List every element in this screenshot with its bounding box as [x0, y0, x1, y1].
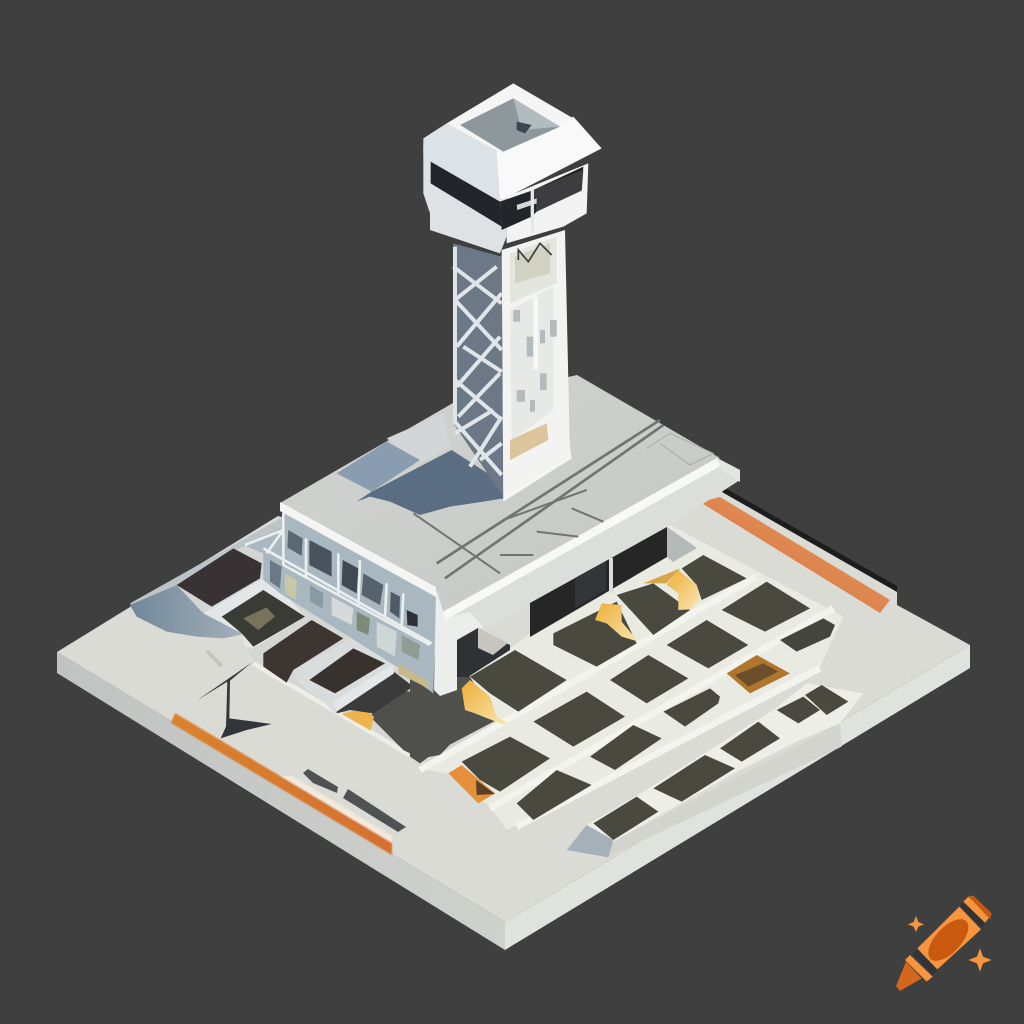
asphalt forecourt	[410, 640, 497, 763]
building shadow	[130, 585, 247, 638]
vane shadow	[197, 663, 272, 738]
left courtyard	[130, 517, 470, 763]
entry door	[457, 628, 510, 677]
facade frames	[245, 513, 432, 645]
cab windows	[431, 162, 502, 227]
pale frame	[420, 525, 843, 830]
orange strip: back right	[700, 497, 890, 613]
apron edge highlight	[253, 663, 410, 755]
lower terminal strip	[607, 723, 842, 857]
back rim	[130, 517, 283, 610]
roof streaks	[413, 420, 713, 578]
asphalt	[370, 690, 470, 758]
tower plinth	[503, 447, 572, 502]
sparkle	[908, 916, 924, 932]
tower shaft left face	[453, 243, 503, 497]
orange strip: front left	[171, 713, 392, 855]
crayon tip	[896, 962, 922, 991]
lattice	[453, 247, 502, 475]
control tower	[423, 83, 602, 502]
yellow light	[342, 708, 374, 731]
windows	[287, 530, 303, 556]
roof shadow	[337, 413, 713, 578]
roof	[280, 375, 740, 620]
wall	[445, 458, 740, 637]
parking slots: front pair	[303, 769, 406, 832]
tower shaft right face	[502, 230, 570, 497]
glazing	[530, 527, 667, 637]
roof lantern	[460, 98, 560, 152]
right eave	[443, 458, 724, 620]
parking grid	[410, 525, 863, 857]
brown bay	[727, 655, 790, 693]
orange corner	[448, 765, 495, 803]
cab roof	[423, 123, 502, 198]
dark bays	[177, 548, 262, 607]
terminal right wall and entrance	[434, 458, 740, 696]
road bars	[420, 577, 833, 827]
white pillar	[434, 590, 483, 696]
base platform	[57, 488, 970, 950]
crayon logo	[896, 896, 992, 991]
crayon collar	[905, 955, 933, 982]
crayon body	[917, 907, 981, 969]
building left facade	[243, 510, 437, 693]
yellow lights	[462, 680, 508, 724]
left eave	[280, 502, 436, 597]
dark bays	[682, 555, 747, 600]
cab lower skirt	[423, 145, 507, 253]
edge marking	[205, 650, 223, 667]
pale apron	[130, 520, 470, 763]
